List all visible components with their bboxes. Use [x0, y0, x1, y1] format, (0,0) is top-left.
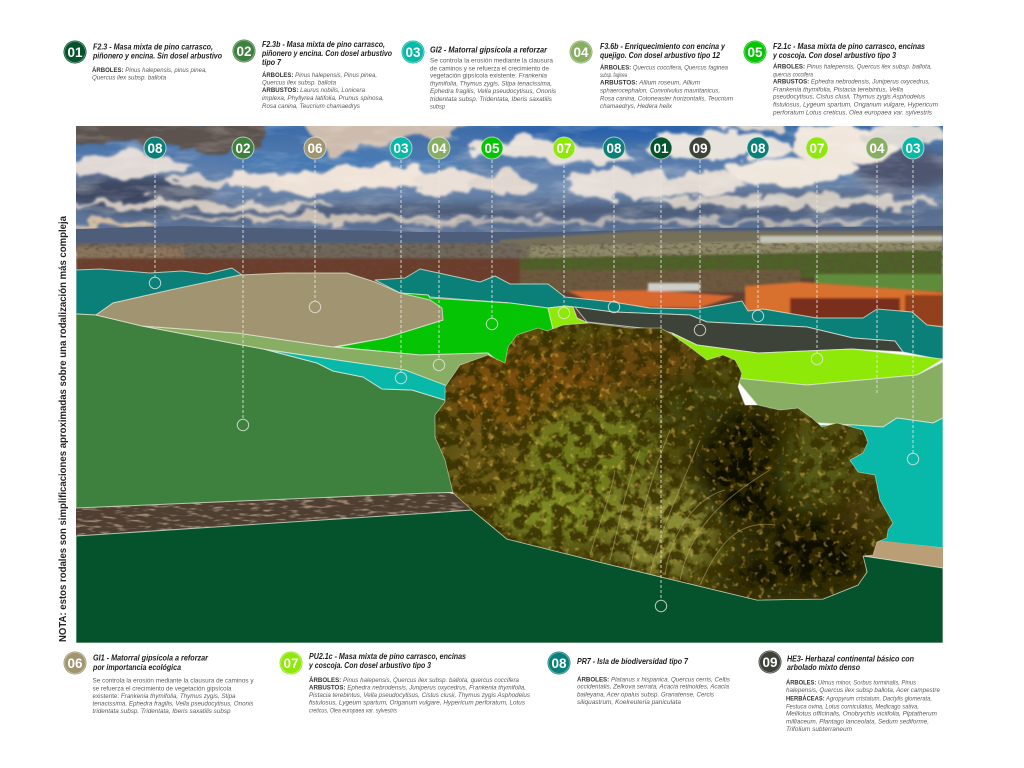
legend 02 [232, 40, 392, 110]
map badge 01: 01 [653, 141, 669, 156]
species 09: ÁRBOLES: Ulmus minor, Sorbus torminalis, Pinus [786, 679, 916, 686]
badge 02 [232, 40, 256, 62]
species 02 [262, 72, 384, 110]
legend 01 [64, 40, 222, 82]
species 05: fistulosus, Lygeum spartum, Origanum vulgare, Hypericum [773, 102, 938, 108]
species 08 [577, 676, 730, 706]
title 07 [308, 652, 466, 670]
tree outline [435, 323, 893, 600]
species 09: Festuca ovina, Lotus corniculatus, Medicago sativa, [786, 704, 919, 710]
infographic page [58, 40, 943, 731]
description 03: Ephedra fragilis, Vella pseudocytisus, Ononis [430, 89, 556, 95]
species 04: subsp. faginea [600, 73, 627, 79]
map badge 07: 07 [556, 141, 572, 156]
species 09: HERBÁCEAS: Agropyrum cristatum, Dactylis glomerata, [786, 696, 932, 703]
map badge 04: 04 [869, 141, 885, 156]
zone 07: small lime [548, 306, 588, 330]
description 06: tenacissima, Ephedra fragilis, Vella pseudocytisus, Ononis [92, 701, 254, 707]
badge 08: 08 [551, 656, 567, 671]
title 02: tipo 7 [262, 58, 281, 67]
species 07: ARBUSTOS: Ephedra nebrodensis, Juniperus oxycedrus, Frankenia thymifolia, [309, 685, 526, 691]
leader: 06 [309, 160, 321, 313]
zone 08: teal mid strip [375, 269, 943, 360]
title 02: piñonero y encina. Con dosel arbustivo [261, 49, 392, 58]
badge 04 [570, 40, 592, 64]
badge 07 [280, 652, 302, 674]
zone 09: dark grey green [575, 307, 903, 353]
species 09 [786, 679, 941, 733]
title 01: piñonero y encina. Sin dosel arbustivo [92, 52, 222, 60]
description 06: Se controla la erosión mediante la clausura de caminos y [92, 679, 254, 685]
species 05: pseudocytisus, Cistus clusii, Thymus zygis Asphodelus [772, 95, 925, 101]
map badge 05: 05 [484, 141, 500, 156]
species 05: perforatum Lotus creticus, Olea europaea var. sylvestris [772, 110, 932, 116]
species 01: ÁRBOLES: Pinus halepensis, pinus pinea, [92, 67, 207, 74]
species 07: creticus, Olea europaea var. sylvestris [309, 709, 397, 715]
species 09: Melilotus officinalis, Onobrychis viciifolia, Piptatherum [786, 712, 937, 718]
badge 01: 01 [67, 45, 83, 60]
badge 06: 06 [67, 656, 83, 671]
photo: sky [76, 126, 943, 232]
leader: 07 right [811, 160, 823, 365]
leader: 05 [486, 160, 498, 330]
grass wisps [590, 430, 775, 585]
map badge 03 [390, 137, 412, 159]
species 04: ÁRBOLES: Quercus coccifera, Quercus faginea [600, 64, 729, 71]
leader: 08 mid [608, 160, 620, 313]
landscape panel [45, 118, 960, 643]
map badge 04 [428, 137, 450, 159]
map badge 06: 06 [307, 141, 323, 156]
title 06: GI1 - Matorral gipsícola a reforzar [93, 654, 209, 662]
title 02 [261, 40, 392, 67]
map badge 04: 04 [431, 141, 447, 156]
legend 07 [280, 652, 530, 715]
leader: 07 left [558, 160, 570, 319]
zone 05: bright green [337, 293, 553, 370]
title 06: por importancia ecológica [92, 663, 181, 672]
map badge 01 [650, 137, 672, 159]
zone 03: turquoise left [268, 350, 450, 401]
description 03: subsp [430, 105, 446, 111]
title 01 [92, 42, 222, 60]
title 03: GI2 - Matorral gipsícola a reforzar [430, 46, 548, 54]
species 08: occidentalis, Zelkova serrata, Acacia retinoides, Acacia [577, 685, 730, 691]
badge 04: 04 [573, 45, 589, 60]
badge 07: 07 [283, 656, 299, 671]
zone 04: sage right [735, 362, 943, 427]
species 05: ÁRBOLES: Pinus halepensis, Quercus ilex subsp. ballota, [773, 64, 932, 71]
species 02: Quercus ilex subsp. ballota [262, 81, 337, 87]
road right [866, 540, 943, 568]
photo: city and fields [76, 231, 943, 343]
species 05: quercus coccifera [773, 72, 814, 78]
species 07 [309, 677, 530, 715]
badge 05: 05 [747, 45, 763, 60]
description 03: Se controla la erosión mediante la clausura [430, 59, 554, 65]
map badge 07 [553, 137, 575, 159]
leader: 09 [694, 160, 706, 336]
title 09 [787, 654, 914, 672]
species 02: ÁRBOLES: Pinus halepensis, Pinus pinea, [262, 72, 377, 79]
leader: 04 right [876, 160, 878, 393]
badge 05 [744, 40, 766, 64]
map badge 05 [481, 137, 503, 159]
description 03: tridentata subsp. Tridentata, Iberis saxatilis [430, 97, 552, 103]
species 08: baileyana, Acer opalus subsp. Granatense, Cercis [577, 692, 714, 698]
zone 06: khaki [96, 273, 443, 347]
badge 01 [64, 40, 86, 64]
species 04: sphaerocephalon, Convolvulus mauritanicus, [600, 89, 720, 95]
zone 02: green [76, 314, 470, 508]
description 03: thymifolia, Thymus zygis, Stipa tenacissima, [430, 81, 552, 87]
title 04: F3.6b - Enriquecimiento con encina y [600, 42, 725, 51]
leader: 08 left [149, 160, 161, 289]
map badge 08 [603, 137, 625, 159]
map badge 02: 02 [235, 141, 251, 156]
species 07: fistulosus, Lygeum spartum, Origanum vulgare, Hypericum perforatum, Lotus [309, 700, 525, 706]
badge 09 [758, 650, 782, 674]
description 06: existente: Frankenia thymifolia, Thymus zygis, Stipa [92, 694, 236, 700]
title 05: y coscoja. Con dosel arbustivo tipo 3 [772, 51, 896, 60]
title 04 [600, 42, 725, 60]
species 09: halepensis, Quercus ilex subsp ballota, Acer campestre [786, 688, 941, 694]
species 02: implexa, Phyllyrea latifolia, Prunus spinosa, [262, 96, 384, 102]
species 04: Rosa canina, Cotoneaster horizontalis, Teucrium [600, 96, 733, 102]
species 07: ÁRBOLES: Pinus halepensis, Quercus ilex subsp. ballota, quercus coccifera [309, 677, 520, 684]
zone 08: teal left [76, 268, 242, 315]
species 04 [600, 64, 733, 110]
species 08: ÁRBOLES: Platanus x hispanica, Quercus cerris, Celtis [577, 676, 730, 683]
map badge 08: 08 [606, 141, 622, 156]
map badge 08 [747, 137, 769, 159]
title 04: quejigo. Con dosel arbustivo tipo 12 [600, 51, 720, 60]
badge 02: 02 [236, 44, 252, 59]
title 05: F2.1c - Masa mixta de pino carrasco, encinas [773, 42, 925, 51]
leader: 01 [655, 160, 667, 612]
leader: 02 [237, 160, 249, 431]
zone 03: turquoise right [820, 418, 943, 548]
species 05: Frankenia thymifolia, Pistacia terebintus, Vella [773, 87, 904, 93]
title 08: PR7 - Isla de biodiversidad tipo 7 [577, 657, 688, 666]
species 05 [772, 64, 938, 116]
badge 03 [402, 40, 424, 64]
zone 04: sage left [142, 326, 500, 387]
rotated note: NOTA: estos rodales son simplificaciones aproximadas sobre una rodalización más compleja [58, 216, 69, 642]
map badge 02 [232, 137, 254, 159]
map badge 07 [806, 137, 828, 159]
map badge 04 [866, 137, 888, 159]
leader: 03 right [907, 160, 919, 465]
title 05 [772, 42, 925, 60]
leader: 08 right [752, 160, 764, 322]
description 06: tridentata subsp. Tridentata, Iberis saxatilis subsp [92, 709, 231, 715]
badge 06 [64, 652, 86, 674]
title 02: F2.3b - Masa mixta de pino carrasco, [262, 40, 385, 49]
title 09: HE3- Herbazal continental básico con [787, 654, 914, 664]
species 09: milliaceum, Plantago lanceolata, Sedum sediforme, [786, 719, 929, 725]
species 02: ARBUSTOS: Laurus nobilis, Lonicera [262, 88, 366, 94]
legend 05 [744, 40, 938, 116]
map badge 07: 07 [809, 141, 825, 156]
map badge 08: 08 [147, 141, 163, 156]
map badge 09 [689, 137, 711, 159]
map badge 03 [902, 137, 924, 159]
species 01 [92, 67, 207, 82]
map badge 03: 03 [393, 141, 409, 156]
title 01: F2.3 - Masa mixta de pino carrasco, [93, 42, 213, 52]
species 09: Trifolium subterraneum [786, 727, 852, 733]
map badge 08 [144, 137, 166, 159]
leader: 04 left [433, 160, 445, 371]
description 06: se refuerza el crecimiento de vegetación gipsícola [92, 686, 232, 692]
zone 01: dark green [76, 510, 943, 643]
legend 04 [570, 40, 733, 110]
title 06 [92, 654, 209, 672]
map badge 09: 09 [692, 141, 708, 156]
tree cut-out [430, 320, 900, 605]
species 02: Rosa canina, Teucrium chamaedrys [262, 104, 360, 110]
species 07: Pistacia terebintus, Vella pseudocytisus, Cistus clusii, Thymus zygis Asphodelus [309, 693, 530, 699]
title 09: arbolado mixto denso [787, 663, 860, 672]
map badge 08: 08 [750, 141, 766, 156]
road left [76, 492, 472, 536]
description 03 [430, 59, 556, 111]
badge 09: 09 [762, 655, 778, 670]
legend 06 [64, 652, 254, 715]
description 06 [92, 679, 254, 715]
map badge 06 [304, 137, 326, 159]
species 01: Quercus ilex subsp. ballota [92, 76, 167, 82]
species 05: ARBUSTOS: Ephedra nebrodensis, Juniperus oxycedrus, [773, 80, 930, 86]
zone 07: lime band [672, 333, 943, 385]
leader: 03 left [395, 160, 407, 384]
legend 09 [758, 650, 941, 733]
species 04: ARBUSTOS: Allium roseum, Allium [600, 81, 700, 87]
species 04: chamaedrys, Hedera helix [600, 104, 673, 110]
species 08: siliquastrum, Koelreuteria paniculata [577, 700, 682, 706]
map badge 03: 03 [905, 141, 921, 156]
legend 03 [402, 40, 556, 111]
title 07: y coscoja. Con dosel arbustivo tipo 3 [308, 661, 431, 670]
legend 08 [548, 652, 730, 706]
badge 08 [548, 652, 570, 674]
badge 03: 03 [405, 45, 421, 60]
description 03: vegetación gipsícola existente: Frankenia [430, 74, 548, 80]
description 03: de caminos y se refuerza el crecimiento de [430, 66, 550, 72]
title 07: PU2.1c - Masa mixta de pino carrasco, encinas [309, 652, 466, 661]
photo: mountains [76, 226, 943, 250]
